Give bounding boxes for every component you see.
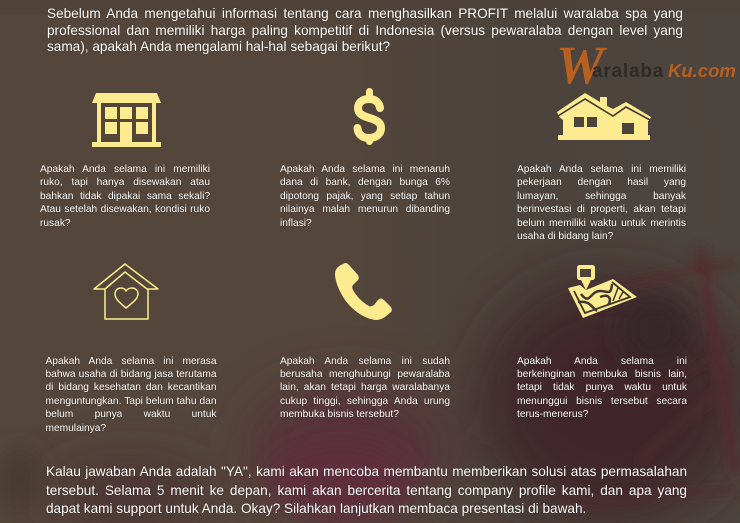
closing paragraph: tersebut. Selama 5 menit ke depan, kami akan bercerita tentang company profile kami, dan apa yang <box>46 482 687 498</box>
text: franchisor contact question: Apakah Anda selama ini sudah <box>280 356 450 366</box>
text: shop question <box>40 164 210 229</box>
text: property question: lumayan, sehingga banyak <box>517 191 686 202</box>
icon: dollar sign <box>354 88 385 145</box>
text: shop question: bahkan tidak dipakai sama sekali? <box>40 191 210 202</box>
logo: WaralabaKu.com: W <box>556 35 604 95</box>
text: bank deposit question <box>280 164 450 229</box>
text: property question: belum memiliki waktu untuk merintis <box>517 218 686 229</box>
text: bank deposit question: Apakah Anda selama ini menaruh <box>280 164 450 175</box>
text: property question: pekerjaan dengan hasil yang <box>517 177 686 188</box>
text: shop question: Apakah Anda selama ini memiliki <box>40 164 210 175</box>
text: beauty business question: di bidang kesehatan dan kecantikan <box>46 382 216 393</box>
text: no time question <box>517 356 688 420</box>
text: franchisor contact question: lain, akan tetapi harga waralabanya <box>280 382 450 393</box>
text: property question: Apakah Anda selama ini memiliki <box>517 164 686 175</box>
closing paragraph <box>46 464 687 516</box>
logo: WaralabaKu.com: Ku.com <box>668 60 736 81</box>
text: no time question: berkeinginan membuka bisnis lain, <box>517 369 687 380</box>
text: beauty business question <box>46 356 217 434</box>
text: bank deposit question: dana di bank, dengan bunga 6% <box>280 177 450 188</box>
text: beauty business question: Apakah Anda selama ini merasa <box>46 356 216 366</box>
intro paragraph: professional dan memiliki harga paling kompetitif di Indonesia (versus pewaralaba dengan level yang <box>47 23 683 38</box>
intro paragraph: Sebelum Anda mengetahui informasi tentang cara menghasilkan PROFIT melalui waralaba spa yang <box>47 6 683 21</box>
text: franchisor contact question <box>280 356 450 420</box>
icon: map with pin <box>568 265 637 318</box>
text: bank deposit question: inflasi? <box>280 218 312 229</box>
text: bank deposit question: nilainya malah menurun dibanding <box>280 204 450 215</box>
text: shop question: rusak? <box>40 218 71 229</box>
icon: shop building <box>92 93 161 147</box>
text: bank deposit question: dipotong pajak, yang setiap tahun <box>280 191 450 202</box>
text: shop question: Atau setelah disewakan, kondisi ruko <box>40 204 210 215</box>
text: property question: berinvestasi di properti, akan tetapi <box>517 204 686 215</box>
text: property question <box>517 164 686 242</box>
text: franchisor contact question: cukup tinggi, sehingga Anda urung <box>280 396 450 407</box>
icon: houses <box>557 93 651 140</box>
closing paragraph: Kalau jawaban Anda adalah "YA", kami akan mencoba membantu memberikan solusi atas permasalahan <box>46 464 687 479</box>
intro paragraph <box>47 6 683 54</box>
logo: WaralabaKu.com: aralaba <box>592 61 664 82</box>
text: no time question: tetapi tidak punya waktu untuk <box>517 382 687 393</box>
logo: WaralabaKu.com <box>556 35 736 95</box>
icon: telephone <box>335 263 392 320</box>
text: shop question: ruko, tapi hanya disewakan atau <box>40 177 210 188</box>
intro paragraph: sama), apakah Anda mengalami hal-hal sebagai berikut? <box>47 39 390 54</box>
text: no time question: Apakah Anda selama ini <box>517 356 687 366</box>
text: no time question: menunggui bisnis tersebut secara <box>517 396 687 407</box>
text: beauty business question: memulainya? <box>46 423 106 434</box>
text: franchisor contact question: membuka bisnis tersebut? <box>280 409 399 420</box>
icon: house with heart <box>93 263 159 320</box>
text: beauty business question: belum punya waktu untuk <box>46 409 216 420</box>
closing paragraph: dapat kami support untuk Anda. Okay? Silahkan lanjutkan membaca presentasi di bawah. <box>46 501 586 516</box>
text: franchisor contact question: berusaha menghubungi pewaralaba <box>280 369 450 380</box>
text: no time question: terus-menerus? <box>517 409 588 420</box>
text: beauty business question: bahwa usaha di bidang jasa terutama <box>46 369 216 380</box>
text: beauty business question: menguntungkan. Tapi belum tahu dan <box>46 396 216 407</box>
text: property question: usaha di bidang lain? <box>517 231 613 242</box>
